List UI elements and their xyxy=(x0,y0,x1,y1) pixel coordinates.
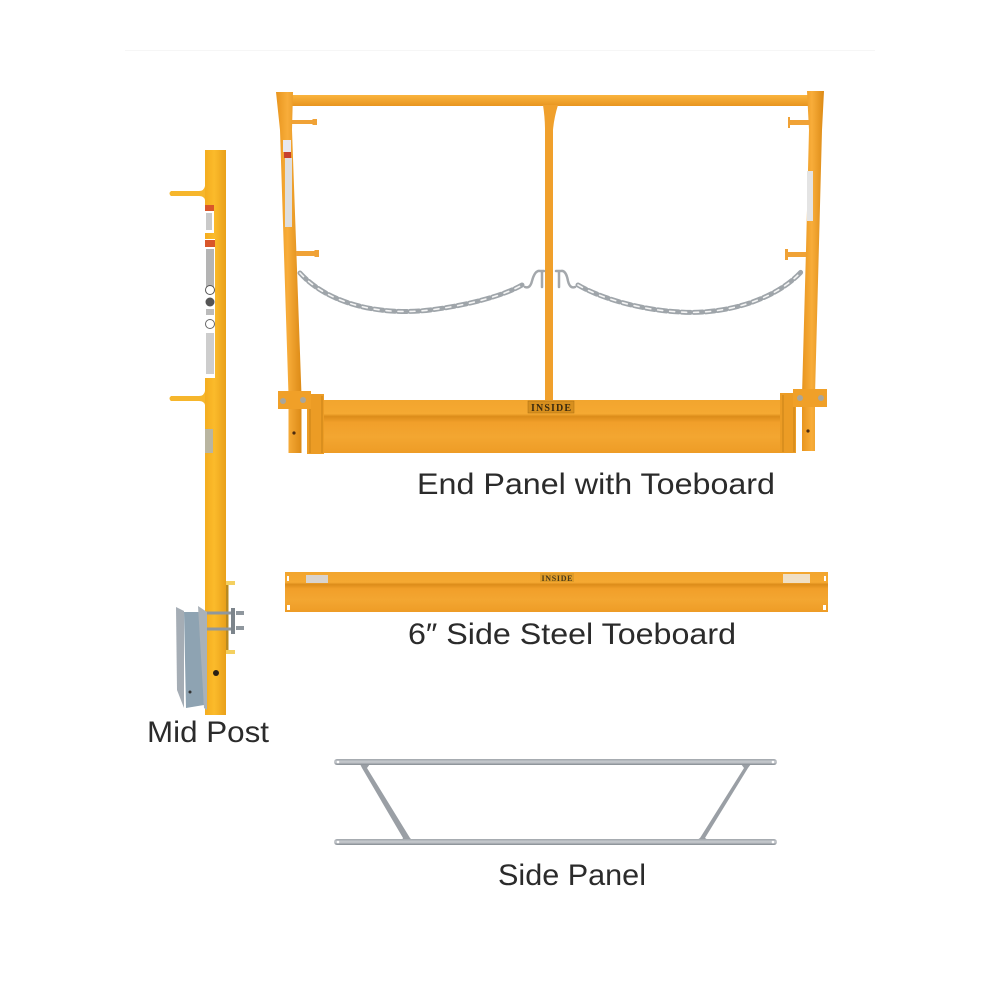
end notches xyxy=(287,576,826,610)
warning label xyxy=(205,205,215,378)
mid post xyxy=(170,150,244,715)
left stickers xyxy=(283,140,292,227)
clamp U-bolts xyxy=(203,608,244,634)
top rail xyxy=(334,759,777,765)
end panel frame xyxy=(276,91,824,453)
braces xyxy=(360,764,751,840)
lower pin xyxy=(170,391,205,405)
right hook xyxy=(556,271,575,287)
top hairline xyxy=(125,50,875,51)
left end bracket xyxy=(278,391,324,454)
post hole xyxy=(213,670,219,676)
board body xyxy=(320,400,782,453)
bottom rail xyxy=(334,839,777,845)
board body xyxy=(285,572,828,612)
right pins xyxy=(785,117,810,260)
right end bracket xyxy=(780,389,827,453)
rear bracket plate and tabs xyxy=(226,581,235,654)
left chain xyxy=(300,273,522,311)
post tube xyxy=(205,150,226,715)
left post xyxy=(276,92,302,453)
right post xyxy=(802,91,824,451)
centre upright xyxy=(543,105,558,400)
mounting bracket xyxy=(176,606,207,710)
inside tag: INSIDE xyxy=(531,403,571,414)
side steel toeboard xyxy=(285,572,828,612)
left hook xyxy=(525,271,544,287)
left pins xyxy=(292,119,319,257)
side panel frame xyxy=(334,759,777,845)
safety chain xyxy=(300,271,801,312)
right sticker xyxy=(783,574,810,583)
rail end holes xyxy=(337,761,774,843)
label: end panel with toeboard: End Panel with Toeboard xyxy=(417,468,775,501)
label: mid post: Mid Post xyxy=(147,716,270,749)
end panel toeboard xyxy=(278,389,827,454)
top rail xyxy=(288,95,813,106)
right sticker xyxy=(807,171,813,221)
right chain xyxy=(578,272,801,312)
label: side panel: Side Panel xyxy=(498,859,646,892)
label: side steel toeboard: 6″ Side Steel Toeboard xyxy=(408,618,736,651)
inside tag: INSIDE xyxy=(542,574,572,583)
lower sticker xyxy=(205,429,213,453)
upper pin xyxy=(170,186,205,200)
left sticker xyxy=(306,575,328,583)
